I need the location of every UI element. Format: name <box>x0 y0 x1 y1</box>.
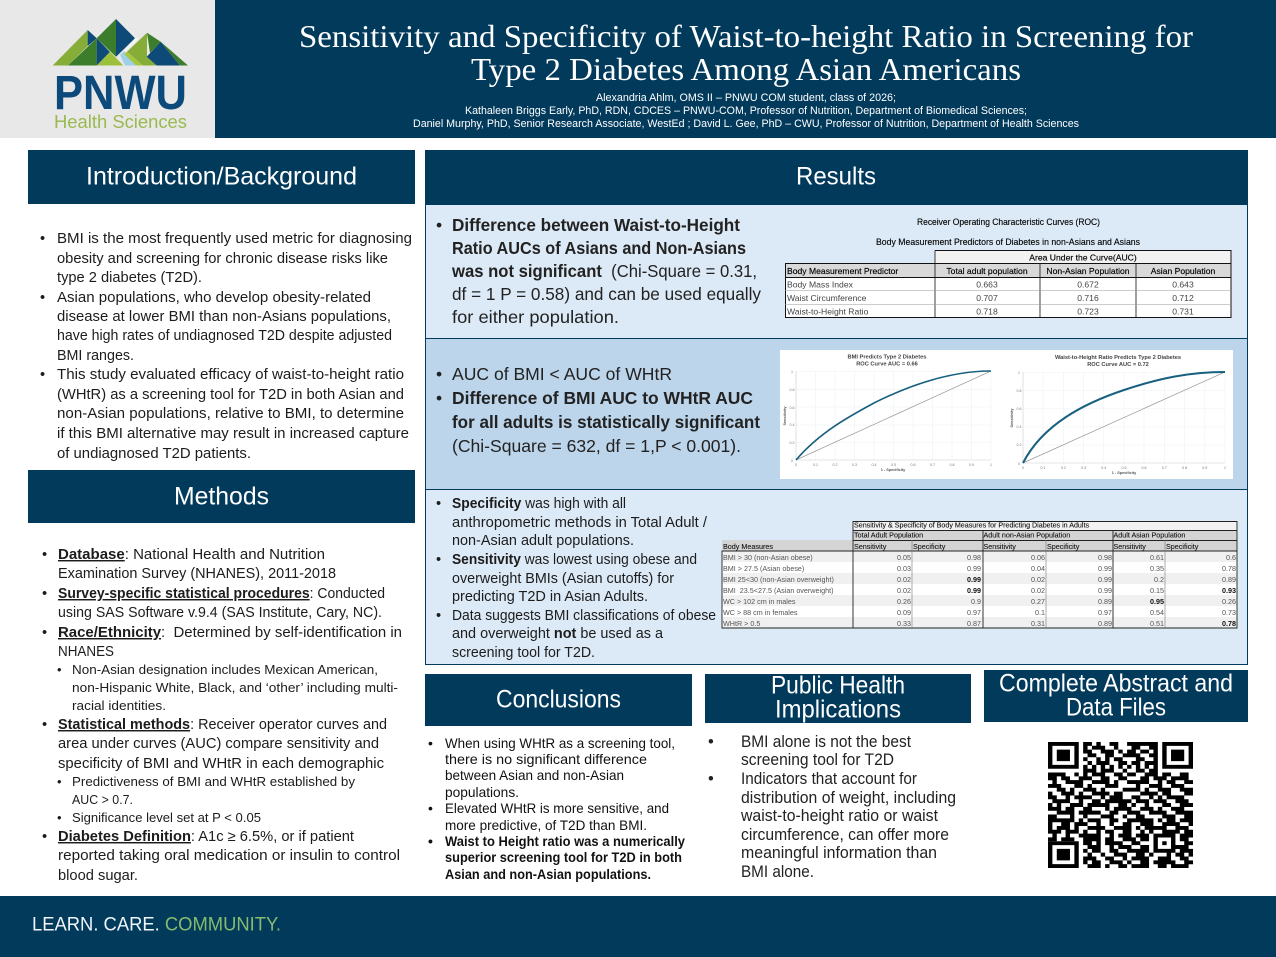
text block: conclusions bullets: superior screening tool for T2D in both <box>445 849 682 865</box>
text block: methods bullets: Predictiveness of BMI and WHtR established by <box>72 774 356 789</box>
chart: BMI ROC curve: 0.7 <box>930 463 935 467</box>
text block: implications bullets: BMI alone. <box>741 863 814 881</box>
title: Type 2 Diabetes Among Asian Americans <box>471 51 1021 87</box>
table: sensitivity and specificity: 0.9 <box>971 597 981 606</box>
chart: WHtR ROC curve: 0.2 <box>1061 466 1066 470</box>
table: sensitivity and specificity: 0.98 <box>1098 553 1112 562</box>
text block: conclusions bullets <box>428 735 685 882</box>
text block: AUC significance: for either population. <box>452 307 619 327</box>
table: sensitivity and specificity: 0.06 <box>1031 553 1045 562</box>
table: sensitivity and specificity: 0.05 <box>897 553 911 562</box>
text block: introduction bullets: (WHtR) as a screening tool for T2D in both Asian and <box>57 387 404 403</box>
chart: BMI ROC curve: 0.5 <box>891 463 896 467</box>
panel: results <box>425 150 1248 664</box>
table: sensitivity and specificity: 0.99 <box>1098 575 1112 584</box>
logo subtitle: Health Sciences <box>54 111 187 132</box>
chart: BMI ROC curve: 0.4 <box>872 463 876 467</box>
text block: AUC significance: df = 1 P = 0.58) and can be used equally <box>452 284 761 304</box>
table: sensitivity and specificity: 0.78 <box>1222 619 1236 628</box>
chart: WHtR ROC curve: Sensitivity <box>1010 408 1014 428</box>
text block: introduction bullets: disease at lower BMI than non-Asians populations, <box>57 309 391 325</box>
text block: methods bullets: • <box>42 547 47 563</box>
table: AUC by population: Total adult population <box>946 266 1028 276</box>
panel: logo <box>0 0 215 138</box>
panel: methods <box>28 470 415 884</box>
heading: results: Results <box>796 162 876 190</box>
table: AUC by population: 0.707 <box>976 293 998 303</box>
panel: results AUC comparison <box>426 204 1248 338</box>
table: AUC by population: 0.712 <box>1172 293 1194 303</box>
text block: AUC significance: • <box>436 215 442 235</box>
table: sensitivity and specificity: 0.73 <box>1222 608 1236 617</box>
table: AUC by population: 0.723 <box>1077 306 1099 316</box>
text block: methods bullets: AUC > 0.7. <box>72 792 133 807</box>
table: AUC by population <box>785 250 1231 318</box>
icon: mountains <box>53 19 188 66</box>
chart: BMI ROC curve: 0.6 <box>910 463 916 467</box>
table: sensitivity and specificity: 0.6 <box>1226 553 1236 562</box>
text block: methods bullets: • <box>42 625 47 641</box>
heading: complete abstract: Data Files <box>1066 694 1166 722</box>
text block: conclusions bullets: When using WHtR as a screening tool, <box>445 735 675 751</box>
text block: introduction bullets: • <box>40 231 45 247</box>
chart: WHtR ROC curve: ROC Curve AUC = 0.72 <box>1087 362 1149 368</box>
table: sensitivity and specificity: 0.87 <box>967 619 981 628</box>
text block: methods bullets: Survey-specific statistical procedures: Conducted <box>58 586 385 602</box>
text block: conclusions bullets: • <box>428 833 433 849</box>
chart: BMI ROC curve: BMI Predicts Type 2 Diabetes <box>848 354 926 360</box>
title <box>299 18 1193 87</box>
heading: introduction: Introduction/Background <box>86 162 357 190</box>
text block: introduction bullets: of undiagnosed T2D patients. <box>57 446 251 462</box>
text block: implications bullets: • <box>708 733 714 751</box>
table: sensitivity and specificity: 0.99 <box>967 586 981 595</box>
table: sensitivity and specificity: 0.89 <box>1098 597 1112 606</box>
panel: introduction <box>28 150 415 462</box>
chart: WHtR ROC curve: 0.4 <box>1101 466 1106 470</box>
table: AUC by population: 0.672 <box>1077 280 1099 290</box>
table: sensitivity and specificity: 0.95 <box>1150 597 1164 606</box>
table: sensitivity and specificity: WC > 88 cm in females <box>723 608 798 617</box>
text block: conclusions bullets: there is no significant difference <box>445 751 647 767</box>
text block: AUC significance <box>436 215 761 327</box>
table: sensitivity and specificity: 0.61 <box>1150 553 1164 562</box>
table: sensitivity and specificity: Sensitivity & Specificity of Body Measures for Predicting Diabetes in Adults <box>854 520 1089 530</box>
table: AUC by population: Waist-to-Height Ratio <box>787 306 869 316</box>
table: sensitivity and specificity: 0.09 <box>897 608 911 617</box>
text block: implications bullets: circumference, can offer more <box>741 826 949 844</box>
table: sensitivity and specificity: 0.98 <box>967 553 981 562</box>
text block: implications bullets: Indicators that account for <box>741 770 917 788</box>
panel: results sensitivity and specificity <box>426 490 1248 664</box>
chart: BMI ROC curve: 0.8 <box>950 463 954 467</box>
text block: conclusions bullets: Elevated WHtR is more sensitive, and <box>445 800 669 816</box>
chart: BMI ROC curve <box>783 354 992 472</box>
text block: BMI vs WHtR <box>436 364 760 456</box>
chart: BMI ROC curve: 0 <box>791 459 793 463</box>
table: sensitivity and specificity: Adult non-Asian Population <box>984 530 1070 540</box>
text block: conclusions bullets: more predictive, of T2D than BMI. <box>445 817 647 833</box>
table: sensitivity and specificity: WHtR > 0.5 <box>723 619 760 628</box>
text block: methods bullets: non-Hispanic White, Black, and ‘other’ including multi- <box>72 680 398 695</box>
chart: WHtR ROC curve: 0.6 <box>1016 407 1022 411</box>
text block: methods bullets: Diabetes Definition: A1c ≥ 6.5%, or if patient <box>58 829 354 845</box>
table: sensitivity and specificity: 0.99 <box>1098 564 1112 573</box>
table: AUC by population: 0.731 <box>1172 306 1194 316</box>
table: sensitivity and specificity: Sensitivity <box>1114 542 1146 551</box>
chart: BMI ROC curve: 0.4 <box>790 423 794 427</box>
table: sensitivity and specificity: WC > 102 cm in males <box>723 597 796 606</box>
heading: complete abstract <box>999 670 1233 722</box>
text block: implications bullets: BMI alone is not the best <box>741 733 911 751</box>
text block: sensitivity and specificity findings: • <box>436 552 441 568</box>
text block: introduction bullets <box>40 231 412 462</box>
text block: BMI vs WHtR: for all adults is statistically significant <box>452 412 760 432</box>
text block: methods bullets: specificity of BMI and WHtR in each demographic <box>58 756 384 772</box>
text block: conclusions bullets: • <box>428 800 433 816</box>
text block: BMI vs WHtR: • <box>436 388 442 408</box>
table: sensitivity and specificity: 0.2 <box>1154 575 1164 584</box>
table: sensitivity and specificity: 0.03 <box>897 564 911 573</box>
chart: WHtR ROC curve: 0.8 <box>1016 389 1022 393</box>
footer band <box>0 896 1276 957</box>
table: AUC by population: Non-Asian Population <box>1046 266 1130 276</box>
table: sensitivity and specificity: 0.78 <box>1222 564 1236 573</box>
table: sensitivity and specificity: 0.51 <box>1150 619 1164 628</box>
chart: WHtR ROC curve: 0.7 <box>1162 466 1167 470</box>
text block: introduction bullets: This study evaluated efficacy of waist-to-height ratio <box>57 367 404 383</box>
panel: title banner <box>215 0 1276 138</box>
table: AUC by population: 0.718 <box>976 306 998 316</box>
table: AUC by population: 0.643 <box>1172 280 1194 290</box>
text block: AUC significance: Difference between Waist-to-Height <box>452 215 740 235</box>
text block: methods bullets: Examination Survey (NHANES), 2011-2018 <box>58 566 336 582</box>
chart: BMI ROC curve: Sensitivity <box>783 406 787 426</box>
table: sensitivity and specificity: Adult Asian Population <box>1114 530 1185 540</box>
text block: sensitivity and specificity findings: predicting T2D in Asian Adults. <box>452 589 648 605</box>
table: sensitivity and specificity: 0.02 <box>1031 575 1045 584</box>
panel: public health implications <box>705 672 971 881</box>
logo wordmark: PNWU <box>54 67 187 120</box>
text block: AUC significance: Ratio AUCs of Asians and Non-Asians <box>452 238 746 258</box>
table: AUC by population: 0.716 <box>1077 293 1099 303</box>
chart: WHtR ROC curve: 0.1 <box>1040 466 1046 470</box>
text block: methods bullets: • <box>42 829 47 845</box>
text block: sensitivity and specificity findings: screening tool for T2D. <box>452 645 595 661</box>
text block: sensitivity and specificity findings: and overweight not be used as a <box>452 626 664 642</box>
panel: results ROC curves <box>426 338 1248 490</box>
text block: sensitivity and specificity findings: overweight BMIs (Asian cutoffs) for <box>452 571 674 587</box>
table: sensitivity and specificity: 0.93 <box>1222 586 1236 595</box>
text block: BMI vs WHtR: Difference of BMI AUC to WHtR AUC <box>452 388 753 408</box>
chart: WHtR ROC curve <box>1010 355 1226 475</box>
table: AUC by population: Asian Population <box>1151 266 1215 276</box>
chart: WHtR ROC curve: 0.2 <box>1016 443 1022 447</box>
chart: BMI ROC curve: 0.2 <box>832 463 838 467</box>
text block: methods bullets: Database: National Health and Nutrition <box>58 547 325 563</box>
table: AUC by population: Body Mass Index <box>787 280 854 290</box>
text block: introduction bullets: obesity and screening for chronic disease risks like <box>57 251 388 267</box>
chart: WHtR ROC curve: Waist-to-Height Ratio Predicts Type 2 Diabetes <box>1055 355 1181 361</box>
table: sensitivity and specificity: BMI > 27.5 (Asian obese) <box>723 564 804 573</box>
text block: sensitivity and specificity findings: • <box>436 496 441 512</box>
chart: BMI ROC curve: 1 <box>990 463 992 467</box>
text block: introduction bullets: Asian populations, who develop obesity-related <box>57 290 371 306</box>
table: sensitivity and specificity: BMI 23.5<27.5 (Asian overweight) <box>723 586 833 595</box>
table: sensitivity and specificity: 0.02 <box>897 575 911 584</box>
text block: sensitivity and specificity findings <box>436 496 716 661</box>
text block: methods bullets: • <box>57 662 62 677</box>
table: sensitivity and specificity: 0.97 <box>967 608 981 617</box>
chart: WHtR ROC curve: 0 <box>1018 462 1020 466</box>
text block: sensitivity and specificity findings: Sensitivity was lowest using obese and <box>452 552 697 568</box>
text block: methods bullets: NHANES <box>58 644 114 660</box>
table: sensitivity and specificity: 0.89 <box>1222 575 1236 584</box>
table: AUC by population: 0.663 <box>976 280 998 290</box>
table: sensitivity and specificity: 0.89 <box>1098 619 1112 628</box>
table: sensitivity and specificity: 0.02 <box>1031 586 1045 595</box>
footer tagline: LEARN. CARE. COMMUNITY. <box>32 914 281 936</box>
chart: BMI ROC curve: 0 <box>795 463 797 467</box>
text block: methods bullets: • <box>42 717 47 733</box>
text block: methods bullets: area under curves (AUC) compare sensitivity and <box>58 736 379 752</box>
icon: QR code <box>1048 742 1193 868</box>
text block: methods bullets <box>42 547 402 884</box>
table: sensitivity and specificity: Specificity <box>913 542 946 551</box>
authors: Kathaleen Briggs Early, PhD, RDN, CDCES – PNWU-COM, Professor of Nutrition, Department of Biomedical Sciences; <box>465 105 1027 117</box>
table: sensitivity and specificity: Specificity <box>1047 542 1080 551</box>
table: sensitivity and specificity: 0.26 <box>1222 597 1236 606</box>
table: sensitivity and specificity: 0.1 <box>1035 608 1045 617</box>
table: sensitivity and specificity: 0.33 <box>897 619 911 628</box>
table: sensitivity and specificity: 0.02 <box>897 586 911 595</box>
chart: WHtR ROC curve: 0.8 <box>1182 466 1187 470</box>
heading: public health implications: Public Health <box>771 672 905 700</box>
text block: introduction bullets: • <box>40 290 45 306</box>
text block: sensitivity and specificity findings: • <box>436 608 441 624</box>
heading: methods: Methods <box>174 482 269 510</box>
text block: methods bullets: Statistical methods: Receiver operator curves and <box>58 717 387 733</box>
chart: WHtR ROC curve: 0.3 <box>1081 466 1086 470</box>
text block: BMI vs WHtR: • <box>436 364 442 384</box>
chart: BMI ROC curve: 1 - Specificity <box>881 468 906 472</box>
table: sensitivity and specificity: 0.99 <box>1098 586 1112 595</box>
chart: BMI ROC curve: 0.1 <box>813 463 818 467</box>
text block: sensitivity and specificity findings: non-Asian adult populations. <box>452 533 634 549</box>
chart: BMI ROC curve: 0.6 <box>790 406 794 410</box>
text block: methods bullets: reported taking oral medication or insulin to control <box>58 848 400 864</box>
heading: public health implications: Implications <box>775 696 901 724</box>
table: sensitivity and specificity: BMI 25<30 (non-Asian overweight) <box>723 575 834 584</box>
chart: WHtR ROC curve: 1 - Specificity <box>1112 471 1137 475</box>
text block: implications bullets: screening tool for T2D <box>741 751 894 769</box>
chart: WHtR ROC curve: 1 <box>1224 466 1226 470</box>
table: AUC by population: Waist Circumference <box>787 293 867 303</box>
text block: introduction bullets: type 2 diabetes (T2D). <box>57 270 202 286</box>
text block: AUC significance: was not significant (Chi-Square = 0.31, <box>451 261 757 281</box>
text block: conclusions bullets: Waist to Height ratio was a numerically <box>445 833 685 849</box>
text block: conclusions bullets: Asian and non-Asian populations. <box>445 866 651 882</box>
chart: BMI ROC curve: ROC Curve AUC = 0.66 <box>856 362 918 368</box>
heading: conclusions: Conclusions <box>496 686 621 714</box>
text block: methods bullets: Race/Ethnicity: Determined by self-identification in <box>58 625 402 641</box>
table: sensitivity and specificity: 0.26 <box>897 597 911 606</box>
text block: methods bullets: racial identities. <box>72 698 166 713</box>
text block: introduction bullets: • <box>40 367 45 383</box>
chart: BMI ROC curve: 0.9 <box>969 463 974 467</box>
text block: introduction bullets: non-Asian populations, relative to BMI, to determine <box>57 406 404 422</box>
text block: methods bullets: • <box>42 586 47 602</box>
table: AUC by population: Area Under the Curve(AUC) <box>1029 252 1137 262</box>
authors: Alexandria Ahlm, OMS II – PNWU COM student, class of 2026; <box>596 92 896 104</box>
authors: Daniel Murphy, PhD, Senior Research Associate, WestEd ; David L. Gee, PhD – CWU, Professor of Nutrition, Department of Health Sciences <box>413 118 1079 130</box>
text block: implications bullets: distribution of weight, including <box>741 789 956 807</box>
title: Sensitivity and Specificity of Waist-to-height Ratio in Screening for <box>299 18 1193 54</box>
text block: methods bullets: • <box>57 774 62 789</box>
text block: conclusions bullets: populations. <box>445 784 519 800</box>
text block: sensitivity and specificity findings: anthropometric methods in Total Adult / <box>452 515 708 531</box>
text block: sensitivity and specificity findings: Specificity was high with all <box>452 496 626 512</box>
heading: AUC table subtitle: Body Measurement Predictors of Diabetes in non-Asians and Asians <box>876 237 1141 247</box>
chart: BMI ROC curve: 0.2 <box>790 441 794 445</box>
heading: ROC table title: Receiver Operating Characteristic Curves (ROC) <box>917 217 1100 227</box>
text block: conclusions bullets: • <box>428 735 433 751</box>
panel: conclusions <box>425 674 692 882</box>
text block: BMI vs WHtR: (Chi-Square = 632, df = 1,P < 0.001). <box>452 436 741 456</box>
authors <box>413 92 1079 130</box>
chart: WHtR ROC curve: 0.4 <box>1016 425 1022 429</box>
text block: introduction bullets: if this BMI alternative may result in increased capture <box>57 426 409 442</box>
text block: methods bullets: • <box>57 810 62 825</box>
table: sensitivity and specificity: 0.15 <box>1150 586 1164 595</box>
text block: methods bullets: Significance level set at P < 0.05 <box>72 810 261 825</box>
text block: conclusions bullets: between Asian and non-Asian <box>445 767 624 783</box>
chart: BMI ROC curve: 1 <box>791 370 793 374</box>
table: sensitivity and specificity: 0.99 <box>967 575 981 584</box>
text block: sensitivity and specificity findings: Data suggests BMI classifications of obese <box>452 608 716 624</box>
table: sensitivity and specificity: 0.35 <box>1150 564 1164 573</box>
text block: introduction bullets: have high rates of undiagnosed T2D despite adjusted <box>57 328 392 344</box>
table: sensitivity and specificity: 0.99 <box>967 564 981 573</box>
text block: implications bullets: waist-to-height ratio or waist <box>740 807 938 825</box>
text block: introduction bullets: BMI is the most frequently used metric for diagnosing <box>57 231 412 247</box>
table: sensitivity and specificity: 0.97 <box>1098 608 1112 617</box>
chart: WHtR ROC curve: 0.5 <box>1122 466 1126 470</box>
chart: WHtR ROC curve: 0 <box>1022 466 1024 470</box>
chart: WHtR ROC curve: 0.6 <box>1142 466 1146 470</box>
table: sensitivity and specificity: Sensitivity <box>984 542 1016 551</box>
text block: implications bullets: • <box>708 770 714 788</box>
text block: methods bullets: Non-Asian designation includes Mexican American, <box>72 662 378 677</box>
chart: BMI ROC curve: 0.3 <box>852 463 857 467</box>
table: sensitivity and specificity: BMI > 30 (non-Asian obese) <box>723 553 813 562</box>
table: sensitivity and specificity: 0.27 <box>1031 597 1045 606</box>
table: sensitivity and specificity <box>722 520 1237 628</box>
table: sensitivity and specificity: Body Measures <box>723 542 773 551</box>
table: sensitivity and specificity: Specificity <box>1166 542 1199 551</box>
chart: WHtR ROC curve: 1 <box>1018 371 1020 375</box>
table: sensitivity and specificity: 0.31 <box>1031 619 1045 628</box>
heading: public health implications <box>771 672 905 724</box>
panel: abstract and data files <box>984 670 1248 868</box>
chart: WHtR ROC curve: 0.9 <box>1202 466 1207 470</box>
table: sensitivity and specificity: Total Adult Population <box>854 530 923 540</box>
table: sensitivity and specificity: 0.04 <box>1031 564 1045 573</box>
text block: implications bullets: meaningful information than <box>741 844 937 862</box>
text block: introduction bullets: BMI ranges. <box>57 348 134 364</box>
text block: methods bullets: blood sugar. <box>58 868 138 884</box>
text block: methods bullets: using SAS Software v.9.4 (SAS Institute, Cary, NC). <box>58 605 382 621</box>
chart: BMI ROC curve: 0.8 <box>790 388 794 392</box>
heading: complete abstract: Complete Abstract and <box>999 670 1233 698</box>
table: AUC by population: Body Measurement Predictor <box>787 266 898 276</box>
table: sensitivity and specificity: Sensitivity <box>854 542 887 551</box>
text block: implications bullets <box>708 733 956 881</box>
text block: BMI vs WHtR: AUC of BMI < AUC of WHtR <box>452 364 672 384</box>
table: sensitivity and specificity: 0.54 <box>1150 608 1164 617</box>
